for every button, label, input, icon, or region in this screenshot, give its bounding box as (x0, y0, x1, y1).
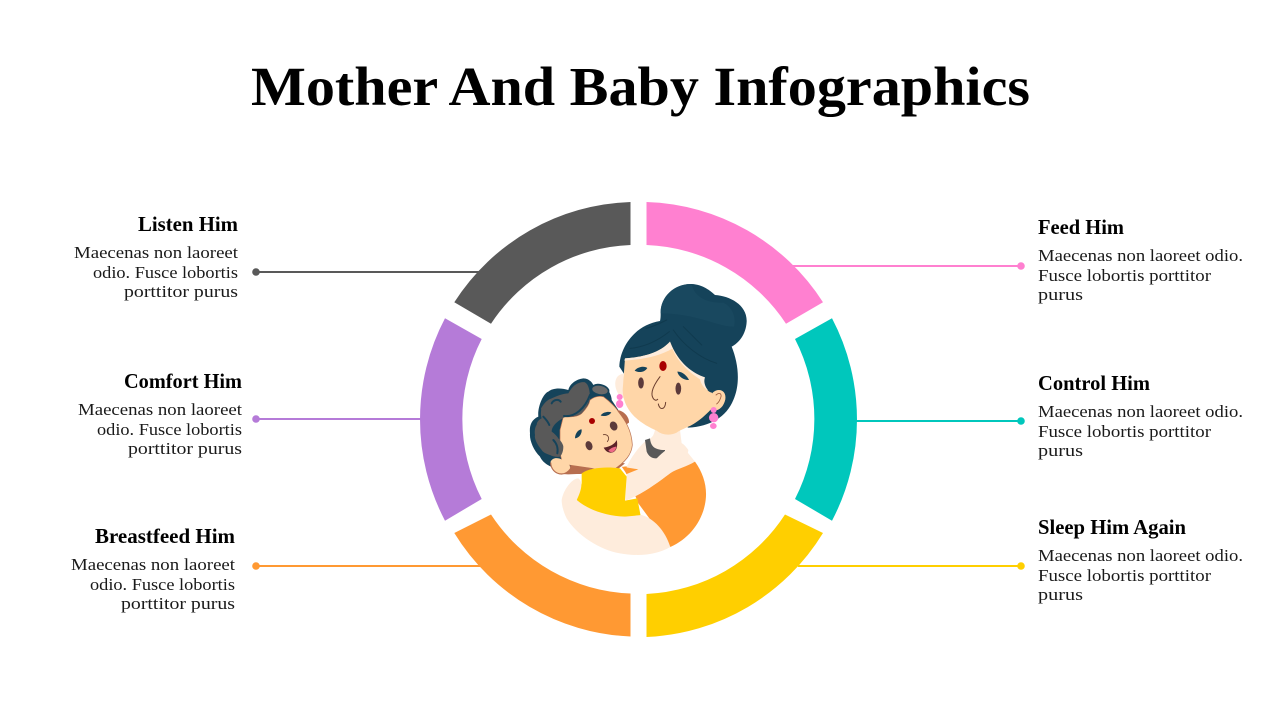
body: purus (1038, 441, 1083, 460)
body: porttitor purus (128, 439, 242, 458)
mother collar strip (622, 467, 638, 474)
baby ear shadow (551, 463, 570, 474)
mother eyes and brows (635, 361, 689, 395)
text block: Feed Him (1038, 215, 1243, 304)
mother earring left (616, 394, 623, 408)
connector: Listen Him (252, 268, 482, 276)
text block: Comfort Him (78, 369, 242, 458)
body: Maecenas non laoreet (78, 400, 242, 419)
mother face (623, 342, 718, 435)
body (1038, 402, 1243, 460)
baby hair strand (543, 395, 590, 453)
body: purus (1038, 285, 1083, 304)
ring segment: Comfort Him (420, 318, 482, 521)
body (78, 400, 242, 458)
text block: Listen Him (74, 212, 238, 301)
mother neck and chest (626, 430, 695, 501)
title: Mother And Baby Infographics (251, 56, 1030, 117)
baby hair fill (535, 382, 590, 457)
body: Fusce lobortis porttitor (1038, 566, 1211, 585)
mother arm (562, 478, 670, 555)
baby mouth and nose (603, 435, 617, 453)
body: porttitor purus (121, 594, 235, 613)
body: porttitor purus (124, 282, 238, 301)
mother torso (623, 462, 706, 547)
connector: Sleep Him Again (798, 562, 1025, 570)
illustration: mother holding baby (530, 284, 747, 555)
body: Maecenas non laoreet (71, 555, 235, 574)
baby arm and hand (626, 442, 688, 501)
ring segment: Breastfeed Him (454, 514, 630, 636)
heading: Feed Him (1038, 215, 1124, 239)
text block: Breastfeed Him (71, 524, 235, 613)
connector: Comfort Him (252, 415, 422, 423)
baby neck (553, 457, 625, 474)
ring chart (420, 202, 857, 637)
heading: Breastfeed Him (95, 524, 235, 548)
ring segment: Listen Him (454, 202, 630, 324)
baby eyes and brows (575, 412, 619, 451)
mother hair and bun (619, 284, 747, 428)
body: Fusce lobortis porttitor (1038, 422, 1211, 441)
baby shirt (577, 468, 641, 517)
baby hair outline (530, 378, 618, 467)
mother ear left (615, 374, 625, 399)
mother nose and mouth (652, 377, 666, 409)
body (1038, 246, 1243, 304)
body: odio. Fusce lobortis (90, 575, 235, 594)
baby ear near (551, 458, 570, 474)
body: purus (1038, 585, 1083, 604)
heading: Sleep Him Again (1038, 515, 1186, 539)
ring segment: Feed Him (646, 202, 823, 324)
heading: Listen Him (138, 212, 238, 236)
body (74, 243, 238, 301)
body: odio. Fusce lobortis (97, 420, 242, 439)
text block: Sleep Him Again (1038, 515, 1243, 604)
body (71, 555, 235, 613)
body: Maecenas non laoreet (74, 243, 238, 262)
heading: Comfort Him (124, 369, 242, 393)
connector: Feed Him (790, 262, 1025, 270)
text block: Control Him (1038, 371, 1243, 460)
ring segment: Sleep Him Again (646, 514, 823, 637)
body: Maecenas non laoreet odio. (1038, 546, 1243, 565)
ring segment: Control Him (795, 318, 857, 521)
mother ear right (710, 390, 725, 410)
body: Maecenas non laoreet odio. (1038, 402, 1243, 421)
baby hair curl (591, 384, 609, 396)
heading: Control Him (1038, 371, 1150, 395)
body: Maecenas non laoreet odio. (1038, 246, 1243, 265)
baby face (560, 396, 632, 471)
mother necklace (645, 438, 665, 458)
mother earring right (709, 407, 718, 429)
body: Fusce lobortis porttitor (1038, 266, 1211, 285)
mother hair highlight (624, 342, 708, 391)
baby far ear (616, 410, 629, 425)
body: odio. Fusce lobortis (93, 263, 238, 282)
connector: Breastfeed Him (252, 562, 482, 570)
connector: Control Him (855, 417, 1025, 425)
body (1038, 546, 1243, 604)
